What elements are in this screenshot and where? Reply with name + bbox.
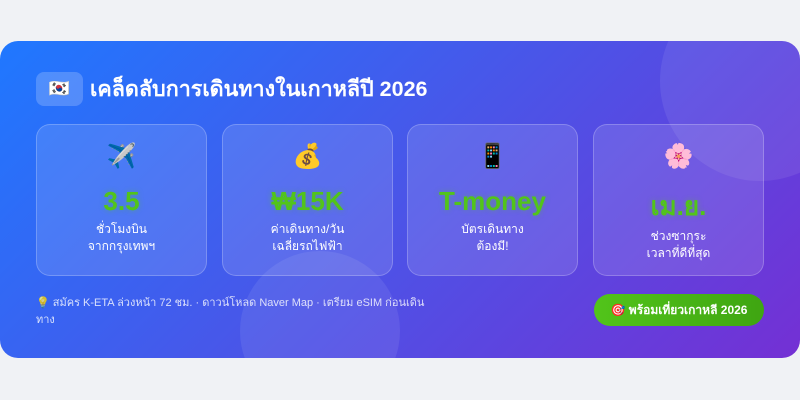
panel: cherry blossom: ช่วงซากุระ [651,229,706,243]
button: ready to travel [594,294,764,326]
panel: cherry blossom: เวลาที่ดีที่สุด [647,246,710,260]
panel: flight hours: 3.5 [103,186,140,216]
footer tips text: 💡 สมัคร K-ETA ล่วงหน้า 72 ชม. · ดาวน์โหลด Naver Map · เตรียม eSIM ก่อนเดินทาง [36,297,424,326]
panel: daily cost: เฉลี่ยรถไฟฟ้า [272,239,343,253]
panel: daily cost: ค่าเดินทาง/วัน [271,222,344,236]
panel: main banner [0,41,800,358]
panel: t-money: 📱 [478,143,507,170]
panel: flight hours: ชั่วโมงบิน [96,222,147,236]
title: เคล็ดลับการเดินทางในเกาหลีปี 2026 [90,77,428,101]
icon: korea flag [36,72,83,106]
panel: flight hours: ✈️ [107,143,136,170]
icon: korea flag: 🇰🇷 [49,79,70,98]
panel: cherry blossom [593,124,764,276]
panel: daily cost: 💰 [293,143,322,170]
panel: flight hours [36,124,207,276]
panel: daily cost: ₩15K [271,186,344,216]
panel: flight hours: จากกรุงเทพฯ [88,239,155,253]
panel: t-money: บัตรเดินทาง [461,222,524,236]
panel: daily cost [222,124,393,276]
panel: t-money [407,124,578,276]
panel: t-money: ต้องมี! [476,239,509,253]
panel: t-money: T-money [439,186,546,216]
panel: cherry blossom: 🌸 [664,143,693,170]
panel: cherry blossom: เม.ย. [651,191,706,221]
button: ready to travel: 🎯 พร้อมเที่ยวเกาหลี 2026 [611,303,747,317]
